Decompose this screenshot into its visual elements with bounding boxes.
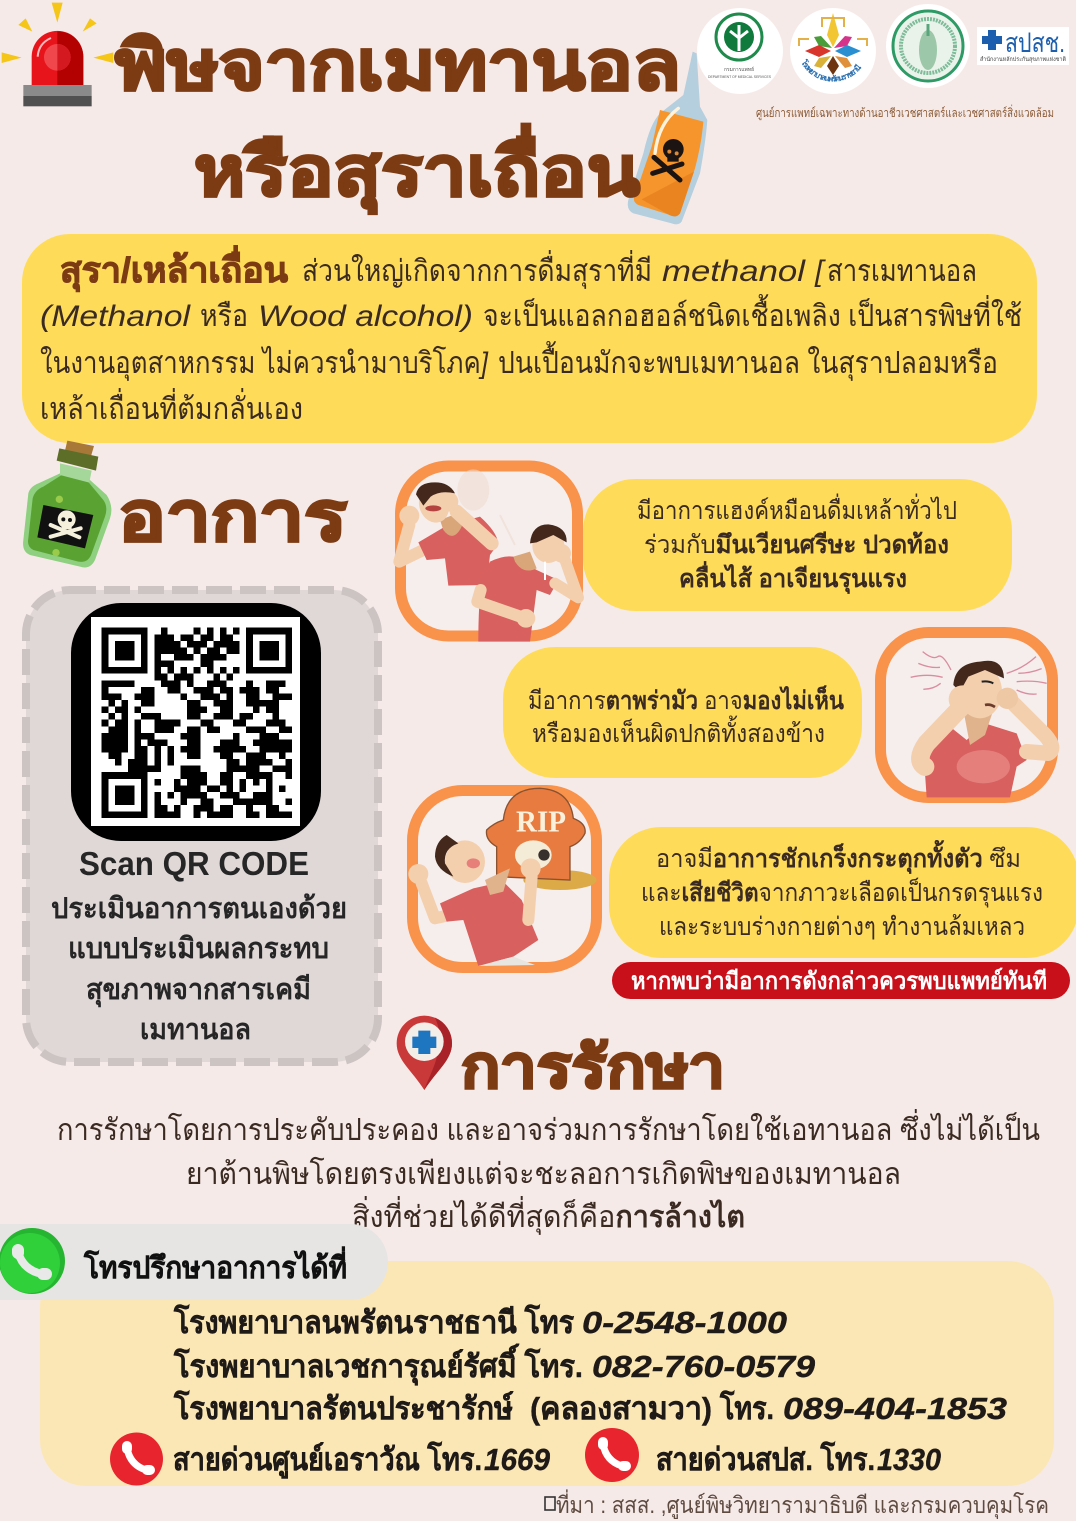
call label pill — [0, 1224, 388, 1300]
definition text: จะเป็นแอลกอฮอล์ชนิดเชื้อเพลิง เป็นสารพิษที่ใช้ — [483, 294, 1022, 333]
icon: green phone — [0, 1228, 65, 1294]
QR description: ประเมินอาการตนเองด้วย — [51, 893, 347, 925]
definition text: [ — [814, 255, 826, 288]
treatment text: สิ่งที่ช่วยได้ดีที่สุดก็คือการล้างไต — [352, 1196, 745, 1236]
hospital phone list: (คลองสามวา) — [530, 1391, 712, 1426]
panel: symptom 3: อาจมีอาการชักเกร็งกระตุกทั้งตัว ซึม — [656, 839, 1021, 875]
panel: QR assessment — [26, 590, 378, 1062]
title: หรือสุราเถื่อน — [194, 123, 640, 214]
callout: see a doctor: หากพบว่ามีอาการดังกล่าวควรพบแพทย์ทันที — [631, 967, 1047, 995]
definition text: ในงานอุตสาหกรรม ไม่ควรนำมาบริโภค] — [40, 345, 489, 382]
definition text: methanol — [662, 255, 807, 288]
hospital phone list: โทร. — [719, 1390, 774, 1426]
panel: symptom 1: คลื่นไส้ อาเจียนรุนแรง — [679, 561, 907, 595]
logo: nhso: สำนักงานหลักประกันสุขภาพแห่งชาติ — [980, 56, 1066, 63]
logo: department of medical services: กรมการแพทย์ — [724, 66, 754, 73]
hospital phone list: 082-760-0579 — [592, 1349, 816, 1384]
definition text: Wood alcohol) — [258, 300, 473, 333]
definition text — [40, 250, 1022, 426]
heading: symptoms: อาการ — [118, 479, 348, 555]
QR code — [71, 603, 321, 841]
hotline social security: 1330 — [877, 1442, 941, 1477]
icon: red phone — [585, 1428, 639, 1482]
panel: symptom 1: มีอาการแฮงค์หมือนดื่มเหล้าทั่วไป — [637, 493, 957, 525]
icon: map pin — [397, 1016, 452, 1090]
call label pill: โทรปรึกษาอาการได้ที่ — [83, 1246, 347, 1285]
panel: symptom 3: และระบบร่างกายต่างๆ ทำงานล้มเหลว — [659, 913, 1025, 941]
icon: red phone — [110, 1432, 163, 1486]
callout: see a doctor — [612, 962, 1070, 999]
illustration: grave and collapse — [408, 788, 597, 968]
definition text: เหล้าเถื่อนที่ต้มกลั่นเอง — [40, 388, 303, 426]
QR description: เมทานอล — [140, 1014, 251, 1046]
illustration: blurred vision — [880, 632, 1052, 798]
hotline social security: สายด่วนสปส. โทร. — [656, 1441, 875, 1477]
definition text: ส่วนใหญ่เกิดจากการดื่มสุราที่มี — [302, 250, 652, 290]
panel: symptom 2 — [503, 647, 862, 778]
QR description: สุขภาพจากสารเคมี — [86, 974, 311, 1007]
definition heading: สุรา/เหล้าเถื่อน — [60, 245, 288, 292]
hospital phone list — [173, 1304, 1007, 1426]
panel: symptom 2: มีอาการตาพร่ามัว อาจมองไม่เห็น — [528, 685, 844, 715]
panel: symptom 3 — [609, 827, 1076, 958]
title — [115, 28, 681, 214]
hospital phone list: 089-404-1853 — [783, 1391, 1007, 1426]
definition text: สารเมทานอล — [827, 255, 977, 288]
hospital phone list: โรงพยาบาลรัตนประชารักษ์ — [173, 1390, 514, 1426]
illustration: grave and collapse: RIP — [516, 805, 566, 839]
title: พิษจากเมทานอล — [115, 28, 681, 104]
hospital phone list: โรงพยาบาลนพรัตนราชธานี โทร — [173, 1304, 574, 1340]
icon: green poison bottle — [23, 441, 111, 567]
QR description — [51, 893, 347, 1046]
panel: symptom 1: ร่วมกับมึนเวียนศรีษะ ปวดท้อง — [644, 531, 949, 559]
logo: department of medical services: DEPARTMENT OF MEDICAL SERVICES — [708, 74, 771, 79]
hotline erawan: 1669 — [484, 1442, 551, 1477]
panel: definition — [22, 234, 1037, 443]
logo: nopparat rajathanee hospital — [790, 8, 876, 94]
illustration: nausea and vomiting — [399, 466, 578, 642]
scan QR label: Scan QR CODE — [79, 845, 309, 882]
icon: poison bottle — [628, 52, 707, 224]
definition text: ปนเปื้อนมักจะพบเมทานอล ในสุราปลอมหรือ — [498, 341, 998, 382]
panel: contacts — [40, 1261, 1054, 1486]
logo: nhso — [977, 27, 1069, 65]
definition text: (Methanol — [40, 300, 191, 333]
panel: symptom 2: หรือมองเห็นผิดปกติทั้งสองข้าง — [532, 715, 825, 748]
logos — [697, 4, 1069, 94]
QR description: แบบประเมินผลกระทบ — [68, 933, 329, 965]
hospital phone list: โรงพยาบาลเวชการุณย์รัศมิ์ โทร. — [173, 1343, 583, 1386]
icon: red siren — [2, 3, 113, 106]
logo: nopparat rajathanee hospital: โรงพยาบาลนพรัตนราชธานี — [802, 58, 862, 82]
panel: symptom 1 — [583, 479, 1012, 611]
panel: symptom 3: และเสียชีวิตจากภาวะเลือดเป็นกรดรุนแรง — [641, 877, 1043, 908]
treatment text — [57, 1109, 1040, 1236]
heading: treatment: การรักษา — [461, 1035, 725, 1100]
logo: bangkok seal — [886, 4, 970, 88]
logo: department of medical services — [697, 8, 783, 94]
hotline erawan: สายด่วนศูนย์เอราวัณ โทร. — [173, 1441, 482, 1479]
definition text: หรือ — [200, 300, 248, 333]
treatment text: ยาต้านพิษโดยตรงเพียงแต่จะชะลอการเกิดพิษของเมทานอล — [186, 1156, 901, 1191]
hospital phone list: 0-2548-1000 — [582, 1305, 787, 1340]
